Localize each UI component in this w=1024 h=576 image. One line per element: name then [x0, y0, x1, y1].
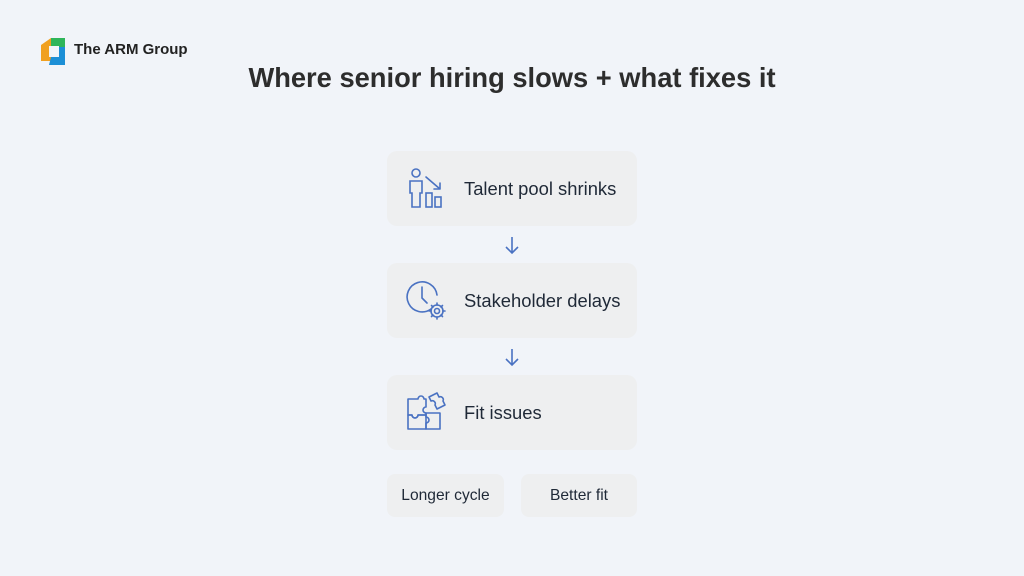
arrow [506, 237, 518, 254]
card: fit issues [387, 375, 637, 450]
icon: puzzle pieces [407, 392, 446, 430]
logo [41, 38, 188, 65]
pill: longer cycle: Longer cycle [401, 487, 490, 504]
arrow [506, 349, 518, 366]
icon: clock with gear [406, 281, 446, 320]
pill: better fit [521, 474, 637, 517]
icon: person and shrinking bars [409, 168, 442, 208]
pill: longer cycle [387, 474, 504, 517]
card: talent pool shrinks [387, 151, 637, 226]
logo: The ARM Group [74, 41, 188, 58]
card: stakeholder delays: Stakeholder delays [464, 290, 620, 311]
title: Where senior hiring slows + what fixes it [248, 62, 776, 93]
card: talent pool shrinks: Talent pool shrinks [464, 178, 616, 199]
card: fit issues: Fit issues [464, 402, 542, 423]
card: stakeholder delays [387, 263, 637, 338]
pill: better fit: Better fit [550, 487, 608, 504]
